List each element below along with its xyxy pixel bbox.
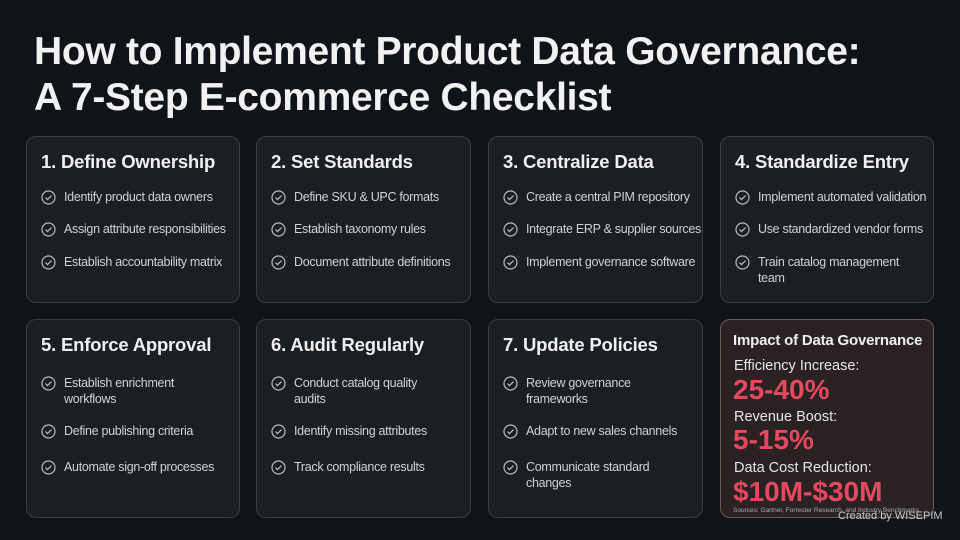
sources: Sources: Gartner, Forrester Research, and Industry Benchmarks: [733, 507, 919, 514]
item: Create a central PIM repository: [526, 190, 690, 204]
item: Establish accountability matrix: [64, 255, 222, 269]
item: Identify product data owners: [64, 190, 213, 204]
item: team: [758, 271, 785, 285]
stat: cost: Data Cost Reduction:: [734, 460, 872, 476]
credit: Created by WISEPIM: [838, 510, 943, 522]
heading step 4: 4. Standardize Entry: [735, 151, 909, 172]
stat: revenue: [733, 409, 837, 455]
panel: step 6: [256, 319, 471, 518]
item: Implement automated validation: [758, 190, 926, 204]
stat: efficiency: 25-40%: [733, 374, 830, 405]
stat: efficiency: [733, 358, 859, 405]
item: Establish enrichment: [64, 376, 174, 390]
heading step 2: 2. Set Standards: [271, 151, 413, 172]
item: Use standardized vendor forms: [758, 222, 923, 236]
item: Communicate standard: [526, 460, 649, 474]
panel: step 4: [720, 136, 934, 303]
item: [735, 255, 900, 285]
stat: revenue: 5-15%: [733, 424, 814, 455]
item: Review governance: [526, 376, 631, 390]
panel: step 3: [488, 136, 703, 303]
item: Establish taxonomy rules: [294, 222, 426, 236]
item: Document attribute definitions: [294, 255, 450, 269]
impact heading: Impact of Data Governance: [733, 332, 922, 349]
item: Define SKU & UPC formats: [294, 190, 439, 204]
item: frameworks: [526, 392, 588, 406]
item: Conduct catalog quality: [294, 376, 417, 390]
item: [41, 376, 174, 406]
heading step 7: 7. Update Policies: [503, 334, 658, 355]
item: workflows: [64, 392, 116, 406]
title: How to Implement Product Data Governance:: [34, 30, 860, 73]
stat: cost: [733, 460, 882, 507]
item: Integrate ERP & supplier sources: [526, 222, 701, 236]
panel: impact: [720, 319, 934, 518]
title: A 7-Step E-commerce Checklist: [34, 76, 611, 119]
item: Train catalog management: [758, 255, 899, 269]
item: Track compliance results: [294, 460, 425, 474]
heading step 3: 3. Centralize Data: [503, 151, 654, 172]
heading step 5: 5. Enforce Approval: [41, 334, 211, 355]
panel: step 7: [488, 319, 703, 518]
item: changes: [526, 476, 571, 490]
item: Identify missing attributes: [294, 424, 427, 438]
heading step 1: 1. Define Ownership: [41, 151, 215, 172]
item: Adapt to new sales channels: [526, 424, 677, 438]
item: Assign attribute responsibilities: [64, 222, 226, 236]
item: Automate sign-off processes: [64, 460, 214, 474]
panel: step 1: [26, 136, 240, 303]
item: [503, 460, 649, 490]
item: audits: [294, 392, 326, 406]
panel: step 2: [256, 136, 471, 303]
stat: revenue: Revenue Boost:: [734, 409, 837, 425]
title: [34, 30, 860, 119]
item: [503, 376, 631, 406]
panel: step 5: [26, 319, 240, 518]
item: Define publishing criteria: [64, 424, 193, 438]
item: Implement governance software: [526, 255, 695, 269]
stat: cost: $10M-$30M: [733, 476, 882, 507]
heading step 6: 6. Audit Regularly: [271, 334, 424, 355]
stat: efficiency: Efficiency Increase:: [734, 358, 859, 374]
item: [271, 376, 418, 406]
